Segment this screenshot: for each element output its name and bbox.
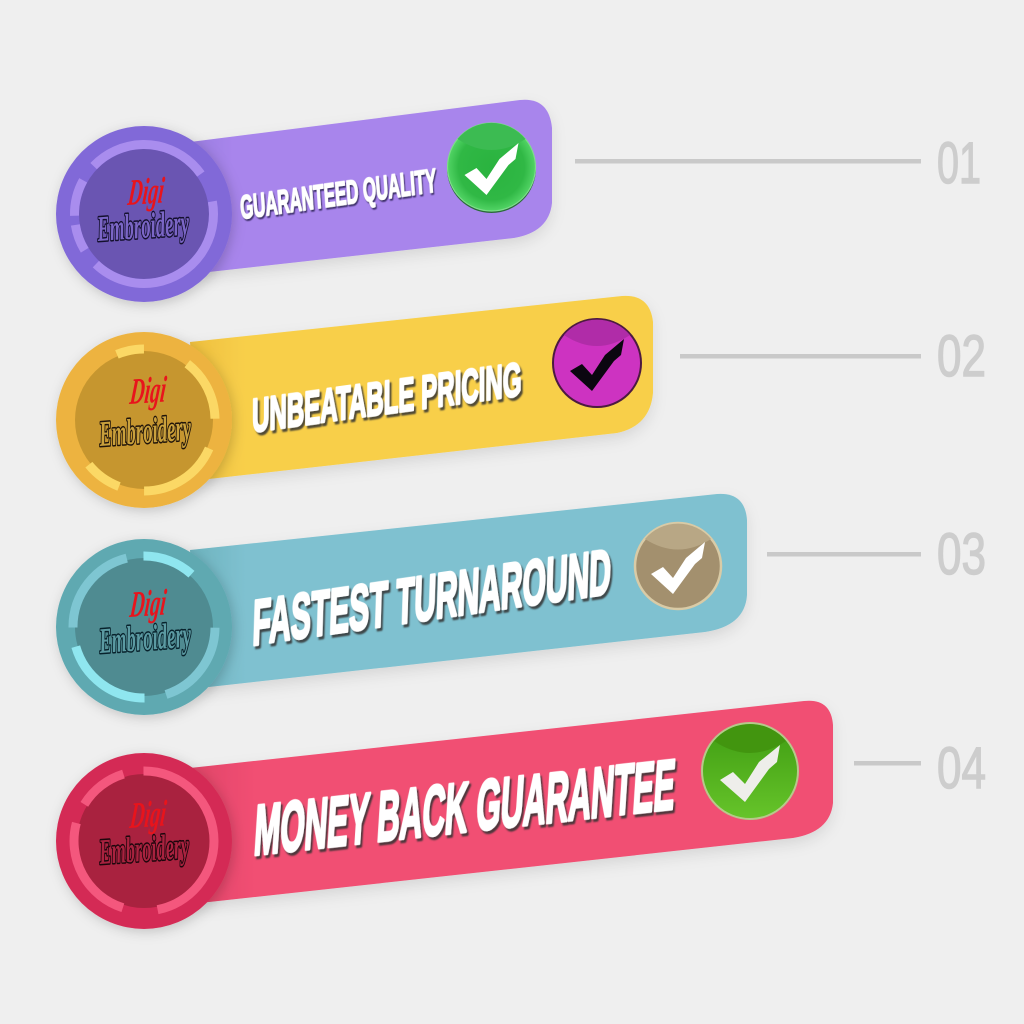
badge 1: Digi xyxy=(126,170,167,214)
ribbon 3 xyxy=(190,494,747,688)
badge 1 xyxy=(46,116,242,312)
icon: magenta check xyxy=(553,319,641,407)
badge 4: Embroidery xyxy=(97,826,191,872)
panel: fastest turnaround: FASTEST TURNAROUND xyxy=(252,537,612,659)
icon: green gloss check xyxy=(702,723,798,819)
connector 4 xyxy=(854,761,921,766)
number 04: 04 xyxy=(937,736,986,801)
connector 1 xyxy=(575,159,921,164)
icon: green check xyxy=(447,123,536,213)
badge 2 xyxy=(44,320,244,520)
badge 3: Embroidery xyxy=(97,615,193,661)
badge 4: Digi xyxy=(128,793,169,837)
badge 1: Embroidery xyxy=(95,203,191,249)
ribbon 4 xyxy=(190,701,833,903)
number 01: 01 xyxy=(937,131,981,196)
label: guaranteed quality: GUARANTEED QUALITY xyxy=(239,162,438,227)
panel: unbeatable pricing xyxy=(44,296,653,520)
label: unbeatable pricing: UNBEATABLE PRICING xyxy=(252,353,522,443)
panel: guaranteed quality xyxy=(46,100,552,312)
ribbon 1 xyxy=(190,100,552,273)
number 03: 03 xyxy=(937,522,986,587)
panel: money back guarantee xyxy=(48,701,833,937)
ribbon 2 xyxy=(190,296,653,480)
badge 4 xyxy=(48,745,240,937)
icon: tan check xyxy=(635,523,721,609)
panel: fastest turnaround xyxy=(56,494,747,715)
badge 2: Digi xyxy=(128,369,169,413)
badge 2: Embroidery xyxy=(97,408,193,454)
badge 3 xyxy=(56,539,232,715)
number 02: 02 xyxy=(937,324,986,389)
badge 3: Digi xyxy=(128,582,169,626)
connector 3 xyxy=(767,552,921,556)
connector 2 xyxy=(680,354,921,358)
